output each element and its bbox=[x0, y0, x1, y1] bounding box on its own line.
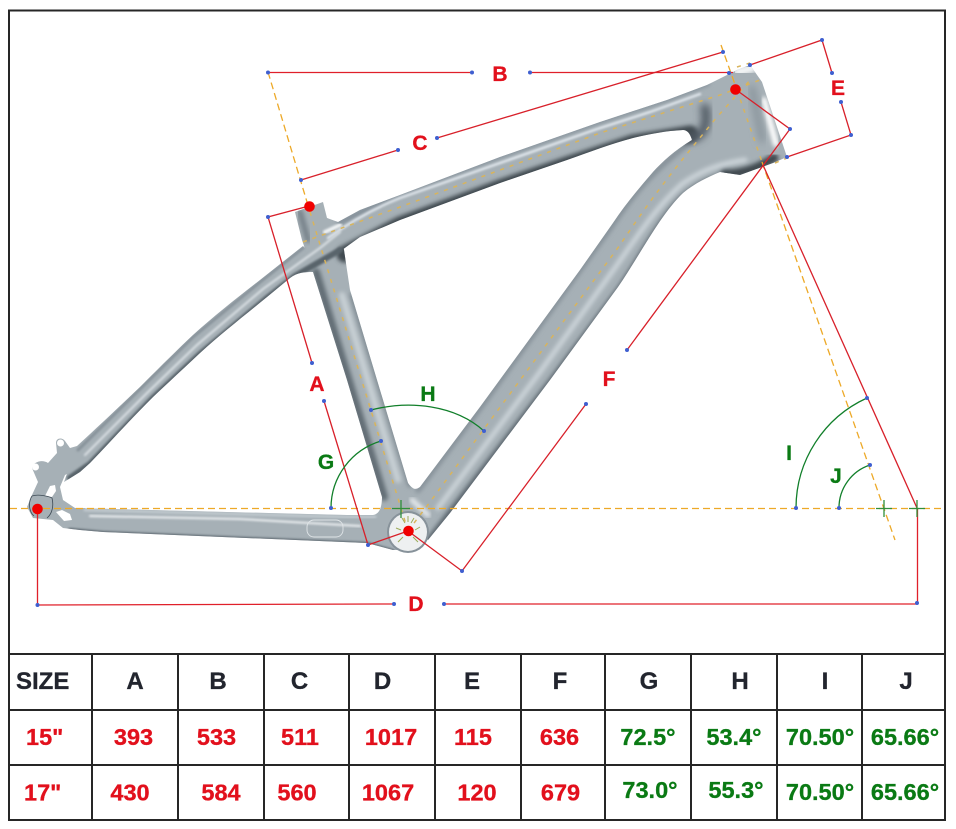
dimension letters: A bbox=[309, 373, 325, 396]
dimension B bbox=[268, 72, 733, 74]
table row: 17 inch: 584 bbox=[201, 780, 241, 806]
angle centre crosses bbox=[392, 500, 925, 518]
dimension C bbox=[301, 52, 723, 180]
table row: 17 inch: 120 bbox=[457, 780, 497, 806]
construction axes: dashed centre lines bbox=[10, 45, 945, 540]
dimension letters: C bbox=[412, 132, 428, 155]
table row: 15 inch: 65.66° bbox=[871, 724, 939, 750]
table row: 15 inch: 511 bbox=[281, 724, 319, 750]
table row: 15 inch bbox=[26, 724, 939, 750]
cable port bbox=[307, 520, 343, 537]
table row: 15 inch: 533 bbox=[197, 724, 236, 750]
table row: 17 inch: 55.3° bbox=[708, 777, 764, 803]
dimension letters: D bbox=[408, 593, 424, 616]
frame shading bbox=[70, 68, 776, 552]
angle arc I bbox=[796, 398, 867, 508]
table row: 15 inch: 70.50° bbox=[786, 724, 854, 750]
table row: 15 inch: 1017 bbox=[365, 724, 417, 750]
table row: 17 inch: 1067 bbox=[362, 780, 414, 806]
table header row: G bbox=[640, 668, 658, 695]
blue dimension end points bbox=[36, 38, 919, 607]
table row: 17 inch: 430 bbox=[110, 780, 150, 806]
red reference points bbox=[32, 84, 741, 536]
table row: 17 inch: 65.66° bbox=[871, 779, 939, 805]
down tube shading bbox=[428, 176, 725, 543]
table row: 17 inch: 560 bbox=[277, 780, 317, 806]
dimension letters: I bbox=[786, 442, 792, 465]
table row: 17 inch: 70.50° bbox=[786, 779, 854, 805]
dimension letters: G bbox=[318, 451, 334, 474]
dimension letters: J bbox=[830, 465, 842, 488]
seat stay shading bbox=[70, 250, 340, 478]
bicycle frame illustration bbox=[27, 65, 787, 553]
table row: 15 inch: 15" bbox=[26, 724, 63, 750]
angle arc H bbox=[371, 405, 484, 431]
dimension letters: H bbox=[420, 383, 436, 406]
table row: 15 inch: 53.4° bbox=[706, 724, 762, 750]
head angle line bbox=[763, 165, 917, 508]
table grid bbox=[9, 654, 945, 820]
table header row: J bbox=[899, 668, 913, 695]
dimension E bbox=[750, 40, 851, 157]
table header row: E bbox=[464, 668, 480, 695]
table header row: H bbox=[731, 668, 749, 695]
angle arc G bbox=[331, 441, 381, 508]
top tube shading bbox=[345, 134, 690, 254]
table header row: C bbox=[291, 668, 308, 695]
dimension A bbox=[268, 206, 408, 545]
dropout cut-outs bbox=[32, 440, 72, 521]
table row: 17 inch bbox=[24, 777, 939, 806]
frame base silhouette bbox=[27, 65, 787, 550]
junction highlight bbox=[325, 225, 340, 232]
dimension F bbox=[408, 89, 790, 571]
seat tube shading bbox=[316, 272, 384, 497]
table header row: D bbox=[374, 668, 391, 695]
table row: 17 inch: 17" bbox=[24, 780, 61, 806]
table header row bbox=[16, 668, 913, 695]
table header row: F bbox=[553, 668, 567, 695]
chain stay shading bbox=[70, 531, 392, 552]
table header row: I bbox=[822, 668, 828, 695]
table header row: SIZE bbox=[16, 668, 69, 695]
head tube shading bbox=[690, 108, 706, 138]
dimension D bbox=[38, 508, 918, 605]
bottom bracket shell bbox=[387, 511, 429, 553]
angle arc J bbox=[839, 465, 870, 508]
dimension letters: B bbox=[492, 63, 508, 86]
table row: 15 inch: 636 bbox=[540, 724, 579, 750]
table header row: B bbox=[209, 668, 227, 695]
table row: 17 inch: 73.0° bbox=[622, 777, 678, 803]
dropout outline bbox=[30, 495, 53, 518]
table row: 15 inch: 115 bbox=[454, 724, 492, 750]
dimension letters bbox=[309, 63, 845, 616]
dimension letters: E bbox=[831, 77, 845, 100]
dimension letters: F bbox=[603, 368, 616, 391]
table row: 17 inch: 679 bbox=[541, 780, 580, 806]
frame centre lines (dotted) bbox=[303, 63, 787, 531]
table row: 15 inch: 393 bbox=[114, 724, 153, 750]
table row: 15 inch: 72.5° bbox=[620, 724, 676, 750]
table header row: A bbox=[126, 668, 144, 695]
size table bbox=[9, 654, 945, 820]
